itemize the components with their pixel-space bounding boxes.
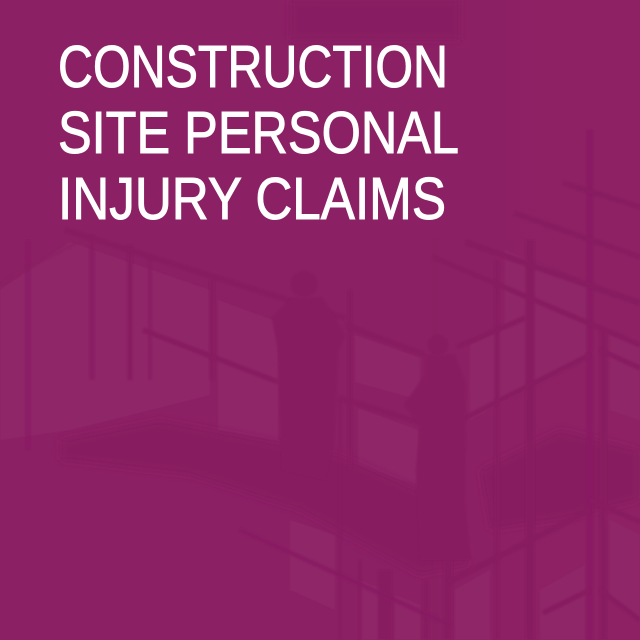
diagonal ledgers bbox=[0, 183, 640, 625]
title bbox=[58, 34, 459, 232]
dark mass behind the workers bbox=[60, 420, 640, 575]
darker top band bbox=[290, 0, 460, 40]
vertical scaffold poles bbox=[28, 130, 603, 640]
title line 3: INJURY CLAIMS bbox=[58, 166, 446, 232]
title line 1: CONSTRUCTION bbox=[58, 34, 448, 100]
title line 2: SITE PERSONAL bbox=[58, 100, 459, 166]
worker silhouette: left bbox=[272, 271, 345, 480]
lighter panels between scaffold tubes bbox=[0, 242, 640, 640]
worker silhouette: right bbox=[404, 335, 470, 560]
